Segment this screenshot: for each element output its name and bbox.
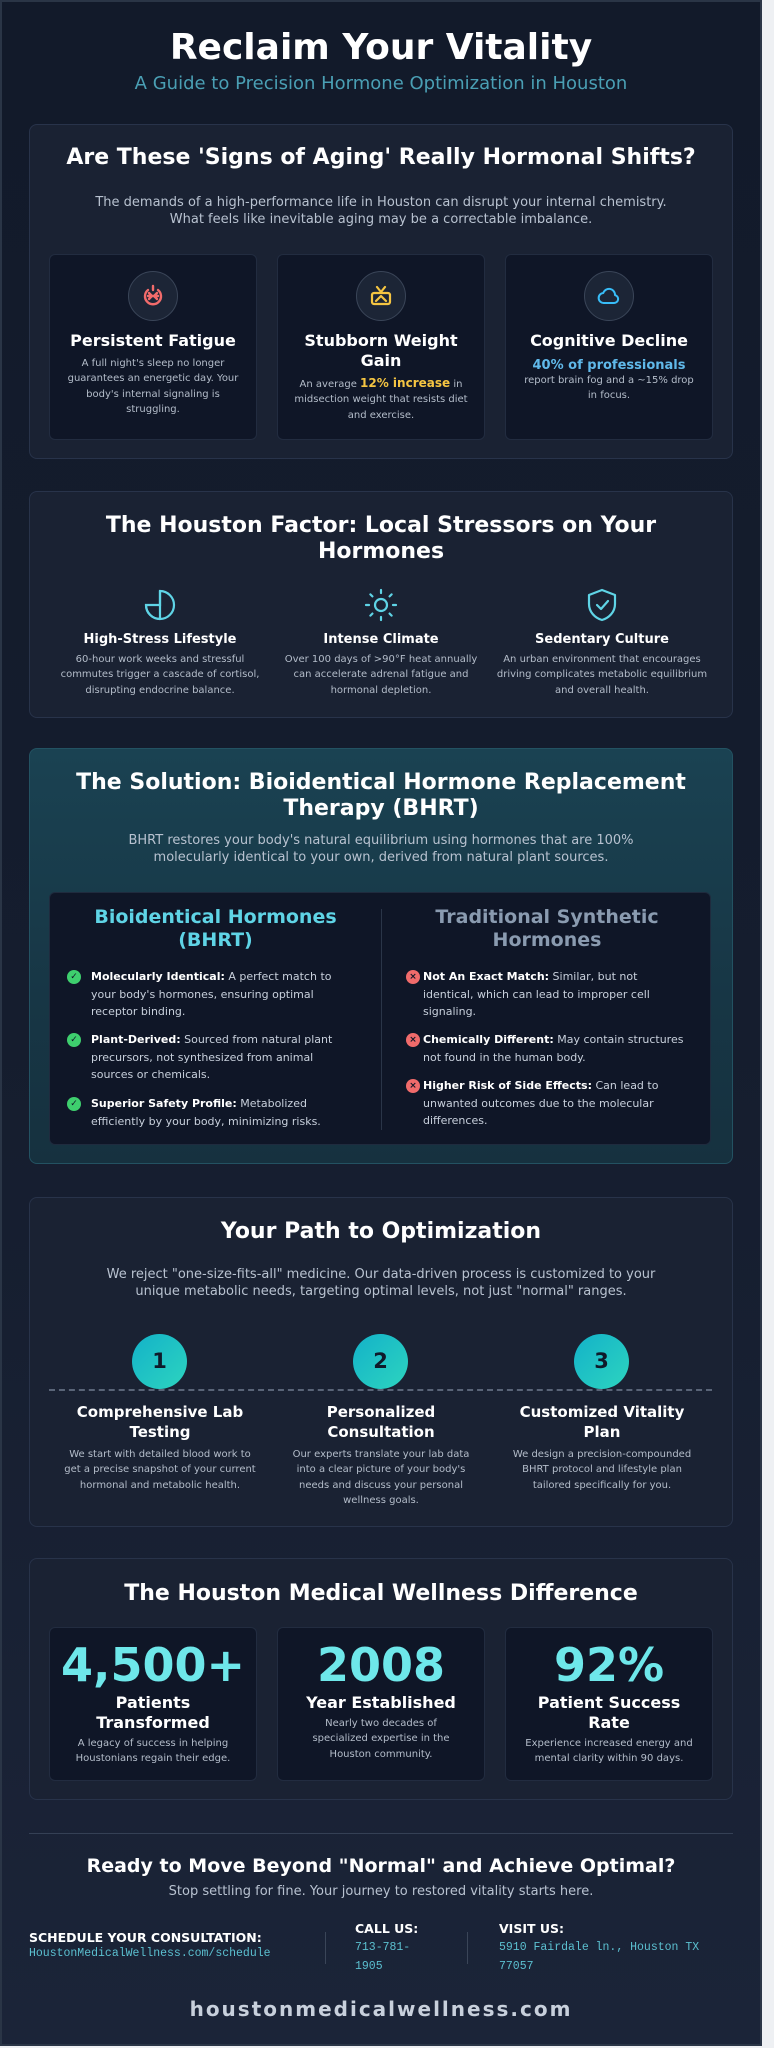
card title: Cognitive Decline <box>530 331 688 350</box>
desc: 60-hour work weeks and stressful commutes trigger a cascade of cortisol, disrupting endocrine balance. <box>61 654 259 696</box>
list item 2: Chemically Different: May contain structures not found in the human body. <box>423 1033 683 1064</box>
list item 1: Not An Exact Match: Similar, but not identical, which can lead to improper cell signaling. <box>423 970 650 1018</box>
heading: path: Your Path to Optimization <box>221 1219 541 1244</box>
heading: solution <box>76 770 686 821</box>
intro text: We reject "one-size-fits-all" medicine. Our data-driven process is customized to your <box>107 1267 655 1282</box>
icon: weight <box>356 271 406 321</box>
card title: Persistent Fatigue <box>70 331 236 350</box>
column: bioidentical <box>67 906 337 1128</box>
card: fatigue <box>49 254 257 440</box>
stat: patients <box>49 1627 257 1781</box>
panel: solution BHRT <box>29 748 733 1164</box>
subtitle: A Guide to Precision Hormone Optimization in Houston <box>135 73 627 94</box>
contact: schedule <box>29 1930 271 1960</box>
dashed timeline <box>49 1389 712 1391</box>
step desc: We start with detailed blood work to get a precise snapshot of your current hormonal and metabolic health. <box>64 1449 256 1491</box>
stat: year: 2008 <box>317 1638 445 1692</box>
stat highlight: 40% of professionals <box>533 358 685 373</box>
contact: visit: 77057 <box>499 1960 534 1973</box>
card text: report brain fog and a ~15% drop in focus. <box>524 375 694 401</box>
intro text <box>95 195 667 227</box>
panel: signs of aging <box>29 124 733 459</box>
step desc: We design a precision-compounded BHRT protocol and lifestyle plan tailored specifically for you. <box>513 1449 691 1491</box>
intro text <box>107 1267 656 1299</box>
step 1 <box>64 1334 256 1491</box>
contact: call: 1905 <box>355 1960 383 1973</box>
contact: schedule: HoustonMedicalWellness.com/schedule <box>29 1947 271 1960</box>
icon: shield <box>588 588 616 622</box>
label: Transformed <box>96 1713 210 1732</box>
list item 2: Plant-Derived: Sourced from natural plant precursors, not synthesized from animal sources or chemicals. <box>91 1033 332 1081</box>
column heading <box>435 906 659 951</box>
heading: houston factor: Hormones <box>318 539 444 564</box>
heading: houston factor <box>106 513 656 564</box>
card title: Gain <box>361 351 401 370</box>
step 2: 2 <box>373 1349 388 1373</box>
step title: Plan <box>584 1423 620 1441</box>
card: weight <box>277 254 485 440</box>
contact: visit: VISIT US: <box>499 1921 564 1936</box>
heading: houston factor: The Houston Factor: Local Stressors on Your <box>106 513 656 538</box>
card text: A full night's sleep no longer guarantees an energetic day. Your body's internal signaling is struggling. <box>68 358 238 415</box>
list item 1: Molecularly Identical: A perfect match to your body's hormones, ensuring optimal receptor binding. <box>91 970 332 1018</box>
panel: path to optimization <box>29 1197 733 1527</box>
card title: Stubborn Weight <box>304 331 458 350</box>
step 3 <box>513 1334 691 1491</box>
list item 3: × <box>409 1081 417 1091</box>
column heading: Hormones <box>493 929 601 951</box>
card title <box>304 331 458 370</box>
step title: Comprehensive Lab <box>77 1403 243 1421</box>
intro text: unique metabolic needs, targeting optimal levels, not just "normal" ranges. <box>135 1284 627 1299</box>
item: climate <box>285 588 477 696</box>
desc: Experience increased energy and mental clarity within 90 days. <box>525 1738 693 1764</box>
intro text: BHRT restores your body's natural equilibrium using hormones that are 100% <box>128 833 634 848</box>
label: Rate <box>588 1713 630 1732</box>
column heading: Traditional Synthetic <box>435 906 659 928</box>
intro text <box>128 833 634 865</box>
step desc: Our experts translate your lab data into a clear picture of your body's needs and discuss your personal wellness goals. <box>293 1449 469 1506</box>
divider line <box>29 1833 733 1834</box>
heading: solution: Therapy (BHRT) <box>283 796 479 821</box>
footer domain: houstonmedicalwellness.com <box>190 1997 572 2021</box>
label: High-Stress Lifestyle <box>83 632 236 647</box>
list item 2: ✓ <box>70 1035 78 1045</box>
desc: Nearly two decades of specialized expertise in the Houston community. <box>312 1718 450 1760</box>
step 3: 3 <box>594 1349 609 1373</box>
intro text: The demands of a high-performance life in Houston can disrupt your internal chemistry. <box>95 195 667 210</box>
stat: patients: 4,500+ <box>61 1638 245 1692</box>
desc: Over 100 days of >90°F heat annually can accelerate adrenal fatigue and hormonal depletion. <box>285 654 477 696</box>
list item 3: Superior Safety Profile: Metabolized efficiently by your body, minimizing risks. <box>91 1097 321 1128</box>
stat: year <box>277 1627 485 1781</box>
contact: visit: 5910 Fairdale ln., Houston TX <box>499 1941 699 1954</box>
list item 3: Higher Risk of Side Effects: Can lead to unwanted outcomes due to the molecular differences. <box>423 1079 658 1127</box>
contact: schedule: SCHEDULE YOUR CONSULTATION: <box>29 1930 262 1945</box>
card: cognitive <box>505 254 713 440</box>
list item 3: ✓ <box>70 1099 78 1109</box>
intro text: molecularly identical to your own, derived from natural plant sources. <box>154 850 608 865</box>
contact: visit <box>499 1921 699 1973</box>
contact: call: 713-781- <box>355 1941 410 1954</box>
label: Year Established <box>306 1693 456 1712</box>
column heading: (BHRT) <box>178 929 253 951</box>
heading: signs of aging: Are These 'Signs of Aging' Really Hormonal Shifts? <box>66 145 696 170</box>
label: Patient Success <box>538 1693 680 1712</box>
label <box>538 1693 680 1732</box>
desc: A legacy of success in helping Houstonians regain their edge. <box>76 1738 230 1764</box>
list item 2: × <box>409 1035 417 1045</box>
stat: success: 92% <box>554 1638 664 1692</box>
card text: An average 12% increase in midsection weight that resists diet and exercise. <box>294 376 468 421</box>
step title: Consultation <box>327 1423 435 1441</box>
column heading: Bioidentical Hormones <box>94 906 337 928</box>
intro text: What feels like inevitable aging may be a correctable imbalance. <box>170 212 592 227</box>
step 2 <box>293 1334 469 1506</box>
step title: Customized Vitality <box>520 1403 684 1421</box>
CTA subtext: Stop settling for fine. Your journey to restored vitality starts here. <box>169 1884 593 1899</box>
step title <box>77 1403 243 1441</box>
item: sedentary <box>497 588 707 696</box>
contact: call: CALL US: <box>355 1921 418 1936</box>
icon: fatigue <box>128 271 178 321</box>
step 1: 1 <box>152 1349 167 1373</box>
label <box>96 1693 210 1732</box>
step title <box>520 1403 684 1441</box>
icon: stress <box>144 590 176 620</box>
list item 1: × <box>409 972 417 982</box>
panel: houston factor <box>29 491 733 718</box>
icon: cloud <box>584 271 634 321</box>
desc: An urban environment that encourages driving complicates metabolic equilibrium and overall health. <box>497 654 707 696</box>
list item 1: ✓ <box>70 972 78 982</box>
label: Patients <box>116 1693 190 1712</box>
panel: difference stats <box>29 1558 733 1800</box>
stat: success <box>505 1627 713 1781</box>
title: Reclaim Your Vitality <box>170 27 592 68</box>
heading: solution: The Solution: Bioidentical Hormone Replacement <box>76 770 686 795</box>
item: stress <box>61 590 259 696</box>
heading: difference: The Houston Medical Wellness Difference <box>124 1581 638 1606</box>
icon: sun <box>364 588 398 622</box>
contact: call <box>355 1921 418 1973</box>
step title <box>327 1403 435 1441</box>
label: Intense Climate <box>323 632 439 647</box>
label: Sedentary Culture <box>535 632 669 647</box>
column: synthetic <box>381 909 712 1130</box>
CTA heading: Ready to Move Beyond "Normal" and Achieve Optimal? <box>87 1855 675 1877</box>
step title: Personalized <box>327 1403 435 1421</box>
column heading <box>94 906 337 951</box>
step title: Testing <box>129 1423 191 1441</box>
comparison box <box>49 892 711 1145</box>
